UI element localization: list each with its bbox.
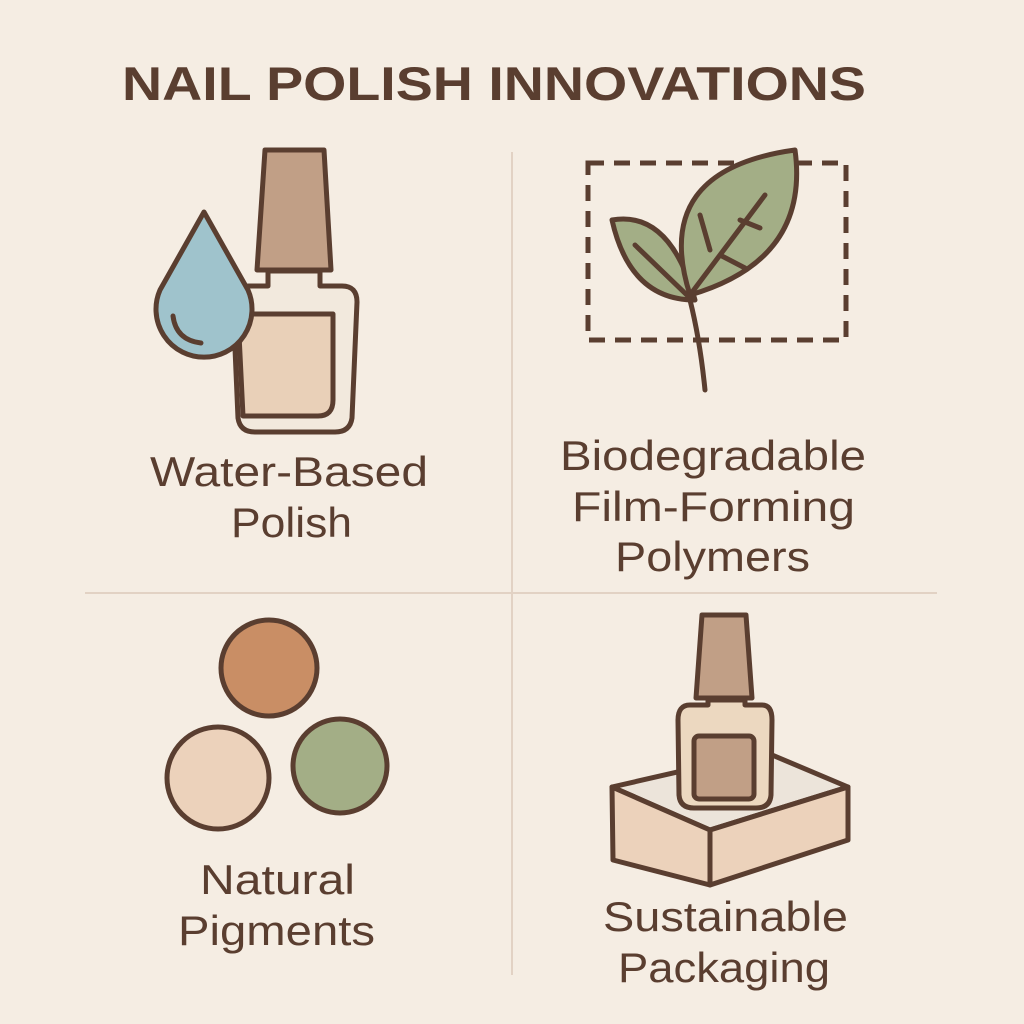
label: Polish (231, 499, 352, 546)
icon: leaves (612, 150, 797, 390)
icon: nail polish bottle (233, 150, 357, 432)
icon: dashed frame (588, 163, 846, 340)
label: Water-Based (150, 448, 428, 495)
panel: natural pigments (167, 620, 387, 954)
icon: pigment circles (167, 620, 387, 829)
label: Natural (200, 856, 355, 903)
label (178, 856, 375, 954)
label: Polymers (615, 533, 810, 580)
icon: box (612, 752, 848, 885)
label (150, 448, 428, 546)
label: Pigments (178, 907, 375, 954)
panel: biodegradable polymers (560, 150, 866, 580)
panel: sustainable packaging (603, 615, 848, 991)
icon: water drop (156, 212, 252, 357)
label: Sustainable (603, 893, 848, 940)
label: Biodegradable (560, 432, 866, 479)
label: Film-Forming (572, 483, 855, 530)
label (560, 432, 866, 580)
title: NAIL POLISH INNOVATIONS (122, 57, 866, 110)
label: Packaging (618, 944, 830, 991)
panel: water-based polish (150, 150, 428, 546)
icon: nail polish bottle (678, 615, 772, 808)
label (603, 893, 848, 991)
